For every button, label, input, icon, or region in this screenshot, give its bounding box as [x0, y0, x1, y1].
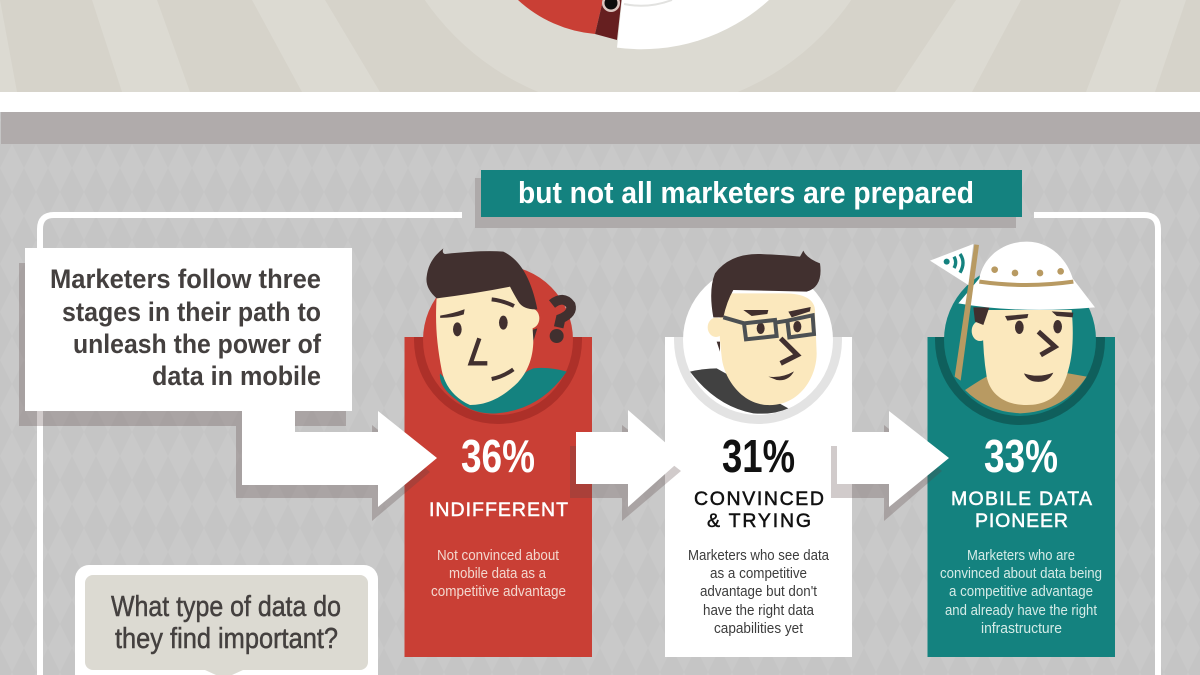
description: convinced and trying — [688, 547, 830, 637]
description: mobile data pioneer: infrastructure — [981, 620, 1062, 637]
description: indifferent: Not convinced about — [437, 547, 560, 564]
description: mobile data pioneer: and already have the right — [945, 602, 1098, 619]
arrow: intro box to indifferent — [19, 263, 437, 521]
label: convinced and trying: & TRYING — [707, 510, 811, 532]
description: mobile data pioneer: Marketers who are — [967, 547, 1075, 564]
intro text box: data in mobile — [152, 361, 321, 391]
panel: mobile data pioneer — [928, 242, 1115, 657]
description: indifferent: mobile data as a — [449, 565, 547, 582]
description: convinced and trying: advantage but don't — [700, 583, 818, 600]
band shadow — [1, 112, 1200, 144]
description: mobile data pioneer — [940, 547, 1102, 637]
top section: sunburst background with gauge — [0, 0, 1200, 92]
stat: 31%: 31% — [722, 430, 795, 482]
icon: indifferent marketer face — [426, 248, 571, 413]
callout: what type of data: What type of data do — [111, 591, 341, 623]
label: mobile data pioneer — [951, 488, 1092, 532]
gauge: needle hub — [602, 0, 620, 12]
arrow: convinced to pioneer — [831, 411, 949, 521]
callout: what type of data: they find important? — [115, 623, 338, 655]
icon: convinced marketer with glasses — [690, 251, 821, 414]
white frame outline — [40, 215, 1158, 675]
gauge: white segment — [617, 0, 769, 49]
label: mobile data pioneer: PIONEER — [975, 510, 1068, 532]
gauge: dark red segment — [595, 0, 622, 40]
description: convinced and trying: as a competitive — [710, 565, 807, 582]
description: mobile data pioneer: a competitive advantage — [949, 583, 1093, 600]
label: indifferent: INDIFFERENT — [429, 499, 568, 521]
white divider band — [0, 92, 1200, 112]
label: convinced and trying — [694, 488, 824, 532]
intro text box — [25, 248, 352, 411]
icon: pioneer marketer with explorer hat and flag — [930, 242, 1095, 413]
intro text box: Marketers follow three — [50, 264, 321, 294]
label: mobile data pioneer: MOBILE DATA — [951, 488, 1092, 510]
heading banner — [475, 170, 1022, 228]
intro text box: unleash the power of — [73, 329, 322, 359]
description: indifferent — [431, 547, 566, 600]
description: mobile data pioneer: convinced about data being — [940, 565, 1102, 582]
stat: 36%: 36% — [461, 430, 535, 482]
label: convinced and trying: CONVINCED — [694, 488, 824, 510]
panel: convinced and trying — [665, 251, 852, 657]
panel: indifferent — [404, 248, 592, 657]
heading banner: but not all marketers are prepared — [518, 175, 974, 210]
description: indifferent: competitive advantage — [431, 583, 566, 600]
arrow: indifferent to convinced — [570, 410, 683, 521]
callout: what type of data — [75, 565, 378, 675]
description: convinced and trying: capabilities yet — [714, 620, 804, 637]
intro text box: stages in their path to — [62, 297, 321, 327]
description: convinced and trying: Marketers who see data — [688, 547, 830, 564]
stat: 33%: 33% — [984, 430, 1058, 482]
gauge: red segment — [518, 0, 603, 34]
description: convinced and trying: have the right data — [703, 602, 815, 619]
